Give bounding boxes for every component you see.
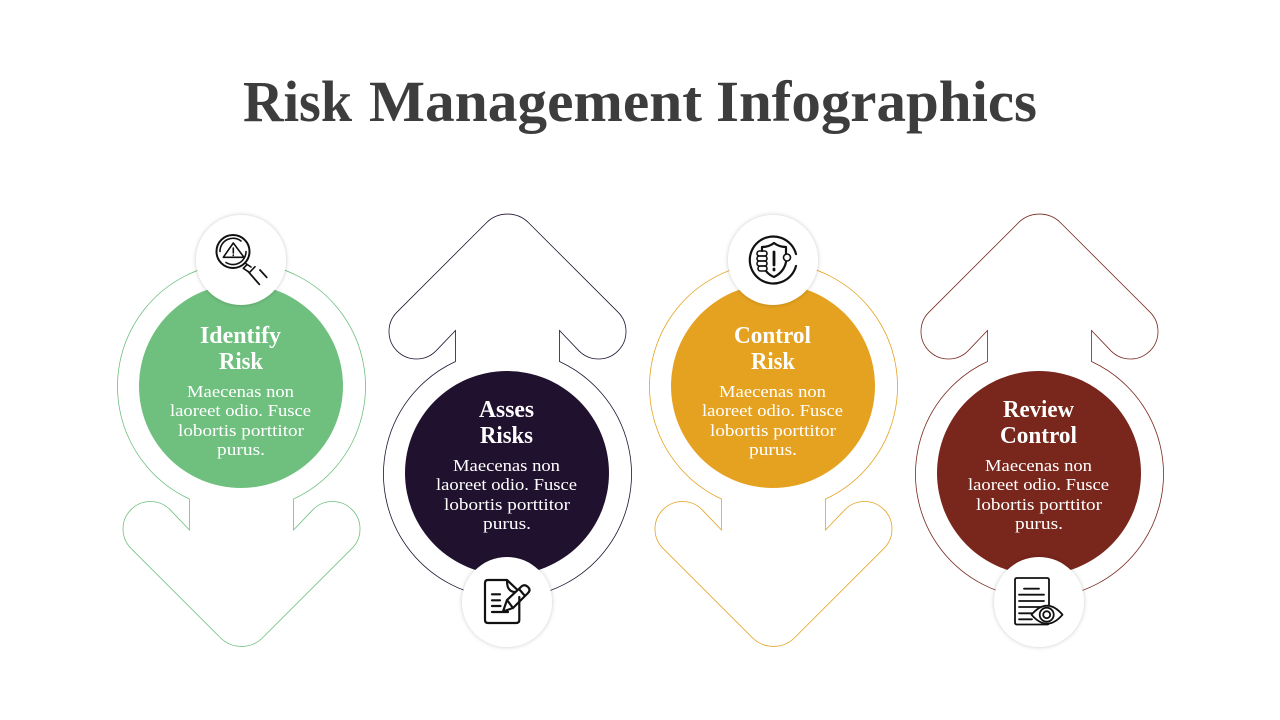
arrow outline: review control (916, 214, 1164, 598)
body text: review control: Maecenas non (985, 456, 1093, 475)
body text: control risk (702, 382, 843, 459)
icon badge: magnifier with warning (196, 215, 286, 305)
body text: identify risk: laoreet odio. Fusce (170, 401, 311, 420)
heading: review control: Review (1003, 397, 1075, 423)
body text: identify risk: Maecenas non (187, 382, 295, 401)
body text: control risk: laoreet odio. Fusce (702, 401, 843, 420)
icon badge: document with eye (994, 557, 1084, 647)
panel: identify risk (118, 215, 366, 646)
body text: review control: laoreet odio. Fusce (968, 475, 1109, 494)
body text: review control: lobortis porttitor (976, 495, 1102, 514)
body text: identify risk (170, 382, 311, 459)
filled circle: review control (937, 371, 1141, 575)
heading: identify risk: Risk (219, 349, 264, 375)
body text: control risk: Maecenas non (719, 382, 827, 401)
body text: control risk: purus. (749, 440, 797, 459)
body text: identify risk: purus. (217, 440, 265, 459)
heading: identify risk: Identify (200, 323, 281, 349)
body text: asses risks: laoreet odio. Fusce (436, 475, 577, 494)
panel: review control (916, 214, 1164, 647)
heading: review control: Control (1000, 423, 1077, 449)
icon badge: shield in hand (728, 215, 818, 305)
body text: asses risks: lobortis porttitor (444, 495, 570, 514)
heading: control risk: Control (734, 323, 811, 349)
title: Risk (243, 69, 353, 134)
filled circle: control risk (671, 284, 875, 488)
body text: identify risk: lobortis porttitor (178, 421, 304, 440)
heading: review control (1000, 397, 1077, 449)
panel: control risk (650, 215, 898, 646)
arrow outline: asses risks (384, 214, 632, 598)
heading: asses risks (479, 397, 534, 449)
heading: asses risks: Asses (479, 397, 534, 423)
body text: asses risks (436, 456, 577, 533)
panel: asses risks (384, 214, 632, 647)
filled circle: identify risk (139, 284, 343, 488)
title (243, 69, 1037, 134)
heading: asses risks: Risks (480, 423, 533, 449)
title: Infographics (716, 69, 1037, 134)
body text: asses risks: purus. (483, 514, 531, 533)
heading: control risk (734, 323, 811, 375)
body text: asses risks: Maecenas non (453, 456, 561, 475)
heading: control risk: Risk (751, 349, 796, 375)
arrow outline: control risk (650, 262, 898, 646)
body text: review control: purus. (1015, 514, 1063, 533)
arrow outline: identify risk (118, 262, 366, 646)
filled circle: asses risks (405, 371, 609, 575)
heading: identify risk (200, 323, 281, 375)
body text: control risk: lobortis porttitor (710, 421, 836, 440)
title: Management (369, 69, 703, 134)
icon badge: document with pencil (462, 557, 552, 647)
body text: review control (968, 456, 1109, 533)
